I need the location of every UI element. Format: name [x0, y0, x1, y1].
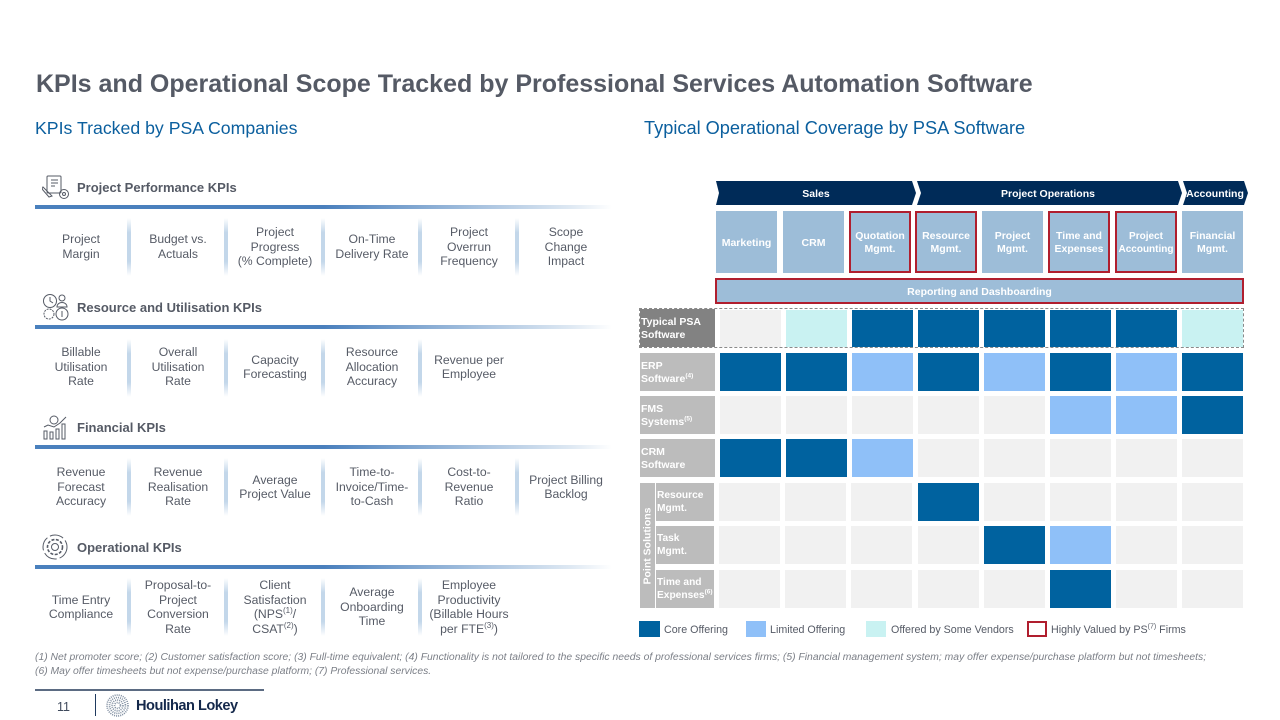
column header: Project Accounting: [1115, 211, 1177, 273]
KPI: [148, 465, 208, 508]
KPI: (% Complete): [238, 254, 312, 268]
column header: Quotation Mgmt.: Quotation: [855, 230, 905, 242]
column header: Time and Expenses: [1048, 211, 1110, 273]
KPI: Conversion: [147, 607, 209, 621]
chevron: Project Operations: Project Operations: [1001, 188, 1095, 200]
KPI: (Billable Hours: [429, 607, 509, 621]
icon: clipboard with gear: [42, 176, 69, 199]
heading: Financial KPIs: [77, 420, 166, 435]
KPI: Time-to-: [350, 465, 394, 479]
heading: Project Performance KPIs: [77, 180, 237, 195]
KPI: [545, 225, 587, 268]
row label: FMS Systems: Systems(5): [641, 415, 692, 428]
row cells: Task Mgmt.: [719, 526, 1243, 564]
KPI: [429, 578, 509, 636]
KPI: Forecast: [57, 480, 105, 494]
chevron: Sales: Sales: [802, 188, 830, 200]
KPI: Overall: [159, 345, 197, 359]
KPI: Average: [349, 585, 395, 599]
KPI: Revenue per: [434, 352, 504, 366]
row cells: Resource Mgmt.: [719, 483, 1243, 521]
KPI: Cost-to-: [447, 465, 491, 479]
legend: Offered by Some Vendors: [891, 624, 1014, 636]
KPI: Employee: [442, 367, 496, 381]
panel: financial KPIs: [35, 416, 603, 514]
heading: Operational KPIs: [77, 540, 182, 555]
KPI: Project: [159, 592, 197, 606]
KPI: [243, 352, 307, 381]
divider rule: [35, 565, 612, 569]
column header: Financial Mgmt.: Financial: [1190, 230, 1235, 242]
chevron: Accounting: [1183, 181, 1248, 205]
icon: clock, gear and person: [43, 294, 68, 320]
page number: 11: [57, 700, 70, 714]
row label: CRM Software: [640, 439, 715, 477]
row label: CRM Software: Software: [641, 458, 685, 470]
KPI: Rate: [68, 374, 94, 388]
divider rule: [35, 325, 612, 329]
KPI: Rate: [165, 494, 191, 508]
KPI: [346, 345, 398, 388]
KPI: Actuals: [158, 247, 198, 261]
divider rule: [35, 205, 612, 209]
column header: Resource Mgmt.: Mgmt.: [931, 243, 961, 255]
KPI: Revenue: [57, 465, 105, 479]
legend: [639, 621, 1186, 637]
panel: project performance KPIs: [35, 176, 602, 274]
KPI: per FTE(3)): [440, 620, 498, 636]
column header: Resource Mgmt.: Resource: [922, 230, 970, 242]
column header: CRM: [783, 211, 844, 273]
KPI: Capacity: [251, 352, 299, 366]
row cells: Time and Expenses: [719, 570, 1243, 608]
KPI: Allocation: [346, 360, 398, 374]
icon: gear in circular arrows: [42, 534, 68, 560]
KPI: [335, 232, 409, 261]
KPI: Proposal-to-: [145, 578, 211, 592]
KPI: Time: [359, 614, 385, 628]
KPI: Satisfaction: [243, 592, 306, 606]
KPI: Ratio: [455, 494, 483, 508]
row: Typical PSA Software: [639, 308, 1244, 348]
KPI: [340, 585, 404, 628]
KPI: Backlog: [544, 487, 588, 501]
row label: Task Mgmt.: Mgmt.: [657, 546, 687, 556]
KPI: Utilisation: [152, 360, 204, 374]
KPI: Change: [545, 240, 587, 254]
column header: Project Accounting: Accounting: [1118, 244, 1174, 255]
reporting and dashboarding band: [715, 278, 1244, 304]
column header: CRM: CRM: [802, 236, 825, 248]
row label: Time and Expenses: [656, 570, 714, 608]
KPI: Overrun: [447, 240, 491, 254]
row label: Resource Mgmt.: Mgmt.: [657, 502, 687, 514]
column header: Project Mgmt.: [982, 211, 1043, 273]
column header: Time and Expenses: Time and: [1056, 230, 1102, 242]
column header: Marketing: Marketing: [722, 236, 771, 248]
subheading: operational coverage: Typical Operational Coverage by PSA Software: [644, 118, 1025, 138]
row label: Typical PSA Software: Software: [641, 328, 685, 340]
legend: Highly Valued by PS(7) Firms: [1051, 623, 1186, 636]
KPI: [238, 225, 312, 268]
row label: Typical PSA Software: Typical PSA: [641, 316, 701, 328]
row cells: ERP Software: [720, 353, 1243, 391]
KPI: Delivery Rate: [335, 247, 409, 261]
KPI: Utilisation: [55, 360, 107, 374]
panel: operational KPIs: [35, 534, 602, 636]
KPI: [49, 592, 113, 621]
row label: Time and Expenses: Time and: [657, 577, 702, 588]
column header: Quotation Mgmt.: Mgmt.: [865, 243, 895, 255]
KPI: Compliance: [49, 607, 113, 621]
KPI: [62, 232, 100, 261]
row cells: FMS Systems: [720, 396, 1243, 434]
row label: Typical PSA Software: [640, 309, 715, 347]
row label: FMS Systems: FMS: [641, 403, 663, 415]
KPI: [529, 472, 603, 501]
panel: resource and utilisation KPIs: [35, 294, 602, 395]
KPI: [56, 465, 106, 508]
column header: Project Mgmt.: Mgmt.: [997, 243, 1028, 255]
KPI: Realisation: [148, 480, 208, 494]
KPI: Margin: [62, 247, 100, 261]
KPI: [336, 465, 408, 508]
footnotes: (6) May offer timesheets but not expense/purchase platform; (7) Professional services.: [35, 666, 431, 677]
KPI: Impact: [548, 254, 584, 268]
KPI: Forecasting: [243, 367, 307, 381]
KPI: Employee: [442, 578, 496, 592]
KPI: Client: [259, 578, 291, 592]
row label: ERP Software: Software(4): [641, 372, 693, 384]
column header: Financial Mgmt.: Mgmt.: [1197, 243, 1228, 255]
KPI: Resource: [346, 345, 398, 359]
title: KPIs and Operational Scope Tracked by Professional Services Automation Software: [36, 70, 1033, 98]
KPI: [55, 345, 107, 388]
subheading: KPIs tracked: KPIs Tracked by PSA Companies: [35, 118, 298, 138]
KPI: Onboarding: [340, 600, 404, 614]
KPI: [152, 345, 204, 388]
row label: Task Mgmt.: Task: [657, 533, 679, 544]
KPI: Scope: [549, 225, 583, 239]
row label: ERP Software: ERP: [641, 360, 663, 372]
logo wordmark: Houlihan Lokey: [136, 698, 238, 714]
column header: Project Mgmt.: Project: [995, 230, 1030, 242]
KPI: Time Entry: [52, 592, 110, 606]
row label: Task Mgmt.: [656, 526, 714, 564]
KPI: Average: [252, 472, 298, 486]
row label: Resource Mgmt.: Resource: [657, 490, 703, 501]
KPI: Revenue: [445, 480, 493, 494]
column header: Project Accounting: Project: [1129, 231, 1163, 242]
row label: ERP Software: [640, 353, 715, 391]
KPI: Productivity: [438, 592, 500, 606]
KPI: [445, 465, 493, 508]
row cells: CRM Software: [720, 439, 1243, 477]
KPI: Frequency: [440, 254, 498, 268]
KPI: [239, 472, 311, 501]
KPI: Billable: [61, 345, 101, 359]
point solutions side label: [640, 483, 655, 608]
KPI: to-Cash: [351, 494, 393, 508]
KPI: [149, 232, 207, 261]
KPI: Budget vs.: [149, 232, 207, 246]
footnotes: [35, 652, 1206, 677]
KPI: CSAT(2)): [252, 620, 298, 636]
divider rule: [35, 445, 612, 449]
KPI: [434, 352, 504, 381]
icon: globe logo: [106, 694, 129, 717]
KPI: Project Value: [239, 487, 311, 501]
row label: Resource Mgmt.: [656, 483, 714, 521]
footer: [35, 689, 264, 720]
KPI: Project: [450, 225, 488, 239]
column header: Marketing: [716, 211, 777, 273]
row label: Time and Expenses: Expenses(6): [657, 588, 713, 600]
column header: Time and Expenses: Expenses: [1054, 243, 1104, 255]
row label: CRM Software: CRM: [641, 446, 665, 458]
KPI: (NPS(1)/: [254, 606, 296, 621]
KPI: [440, 225, 498, 268]
row cells: Typical PSA Software: [720, 310, 1243, 347]
row label: FMS Systems: [640, 396, 715, 434]
column header: Resource Mgmt.: [915, 211, 977, 273]
KPI: Rate: [165, 374, 191, 388]
KPI: Project Billing: [529, 472, 603, 486]
KPI: Rate: [165, 622, 191, 636]
KPI: Invoice/Time-: [336, 480, 408, 494]
KPI: [243, 578, 306, 636]
chevron: Project Operations: [917, 181, 1182, 205]
chevron: Accounting: Accounting: [1186, 188, 1244, 200]
KPI: Accuracy: [56, 494, 106, 508]
KPI: Project: [62, 232, 100, 246]
chevron header: Sales, Project Operations, Accounting: [716, 181, 1248, 205]
icon: bars with dollar coin: [44, 416, 66, 440]
chevron: Sales: [716, 181, 916, 205]
column header: Quotation Mgmt.: [849, 211, 911, 273]
KPI: Project: [256, 225, 294, 239]
column header: Financial Mgmt.: [1182, 211, 1243, 273]
footnotes: (1) Net promoter score; (2) Customer satisfaction score; (3) Full-time equivalent; (4) Functionality is not tailored to the specific needs of professional services firms; (5) Financial management system; may offer expense/purchase platform but not timesheets;: [35, 652, 1206, 663]
reporting and dashboarding band: Reporting and Dashboarding: [907, 286, 1052, 298]
legend: Limited Offering: [770, 624, 845, 636]
KPI: On-Time: [349, 232, 395, 246]
KPI: [145, 578, 211, 636]
KPI: Revenue: [154, 465, 202, 479]
KPI: Progress: [251, 240, 299, 254]
legend: Core Offering: [664, 624, 728, 636]
point solutions side label: Point Solutions: [642, 507, 654, 584]
KPI: Accuracy: [347, 374, 397, 388]
heading: Resource and Utilisation KPIs: [77, 300, 262, 315]
